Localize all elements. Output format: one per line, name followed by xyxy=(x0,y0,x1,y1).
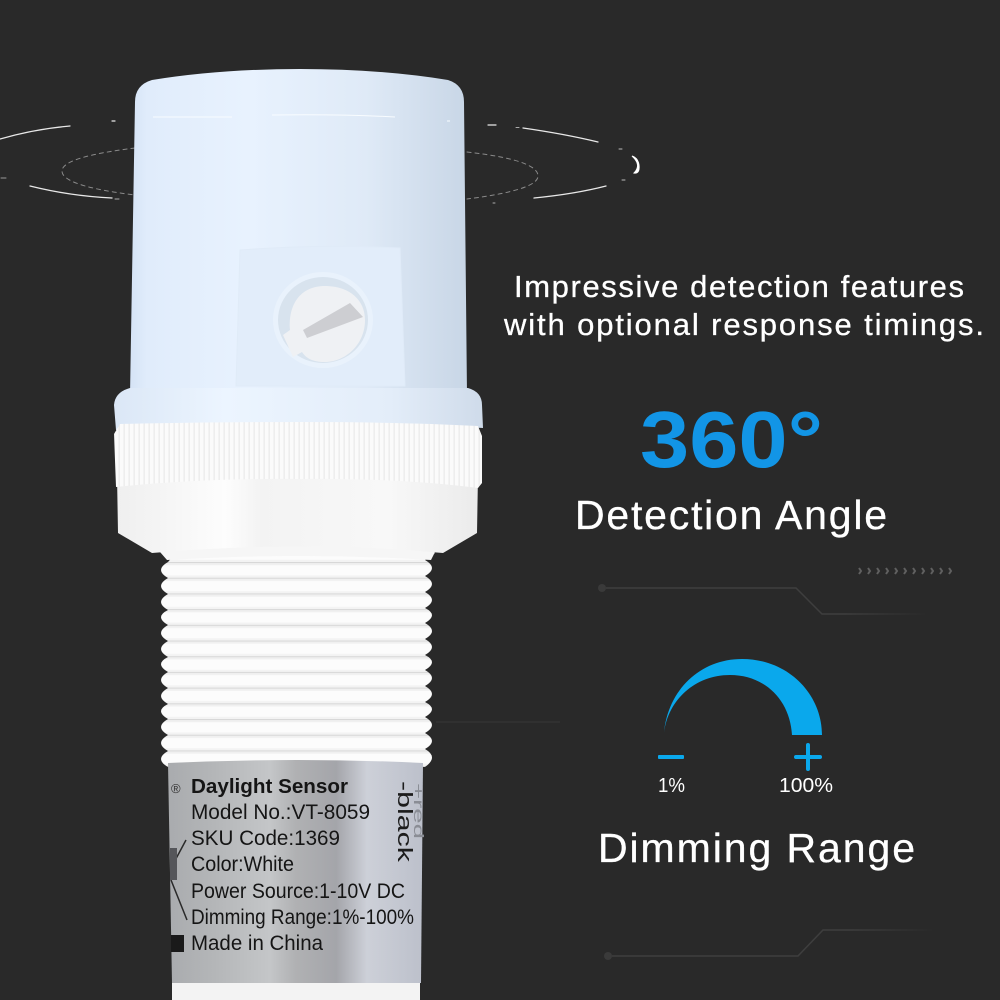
screw slot xyxy=(303,303,363,338)
detection rings xyxy=(0,121,639,203)
label text: Made in China xyxy=(191,932,323,955)
knurled ring xyxy=(114,422,482,488)
gauge arc xyxy=(664,659,822,735)
dimming range label: Dimming Range xyxy=(598,825,915,871)
1 percent label: 1% xyxy=(658,775,685,797)
label text: Power Source:1-10V DC xyxy=(191,880,405,903)
minus sign xyxy=(658,755,684,759)
360 degree figure: 360° xyxy=(640,395,823,484)
label text xyxy=(191,776,414,955)
screw disc xyxy=(283,286,365,362)
wire labels: +red xyxy=(411,783,427,839)
decorative chevrons xyxy=(859,568,951,574)
product: daylight sensor xyxy=(114,69,483,1000)
label symbols: ® xyxy=(171,781,181,796)
flange xyxy=(114,388,483,430)
intro text xyxy=(503,269,984,342)
label symbols xyxy=(170,781,187,952)
100 percent label: 100% xyxy=(779,775,833,797)
metal label xyxy=(168,760,423,983)
label base xyxy=(172,975,420,1000)
detection angle label: Detection Angle xyxy=(575,492,887,538)
wire labels xyxy=(393,781,427,864)
thread collar xyxy=(160,538,435,560)
plus sign xyxy=(796,745,820,769)
label text: Dimming Range:1%-100% xyxy=(191,906,414,929)
label text: Model No.:VT-8059 xyxy=(191,801,370,824)
cap highlight lines xyxy=(153,115,450,121)
hex nut xyxy=(117,475,478,553)
circuit line lower xyxy=(604,930,932,960)
wire labels: -black xyxy=(393,781,415,864)
dimming gauge xyxy=(658,659,833,797)
intro text: Impressive detection features xyxy=(514,269,964,304)
sensor cap xyxy=(130,69,467,395)
threaded stem xyxy=(161,553,435,767)
adjuster recess xyxy=(236,246,405,386)
label text: Color:White xyxy=(191,853,294,876)
intro text: with optional response timings. xyxy=(503,307,984,342)
circuit line upper xyxy=(598,584,925,614)
adjuster screw xyxy=(273,272,373,368)
label text: Daylight Sensor xyxy=(191,776,348,798)
label text: SKU Code:1369 xyxy=(191,827,340,850)
faint connector line xyxy=(436,721,560,723)
